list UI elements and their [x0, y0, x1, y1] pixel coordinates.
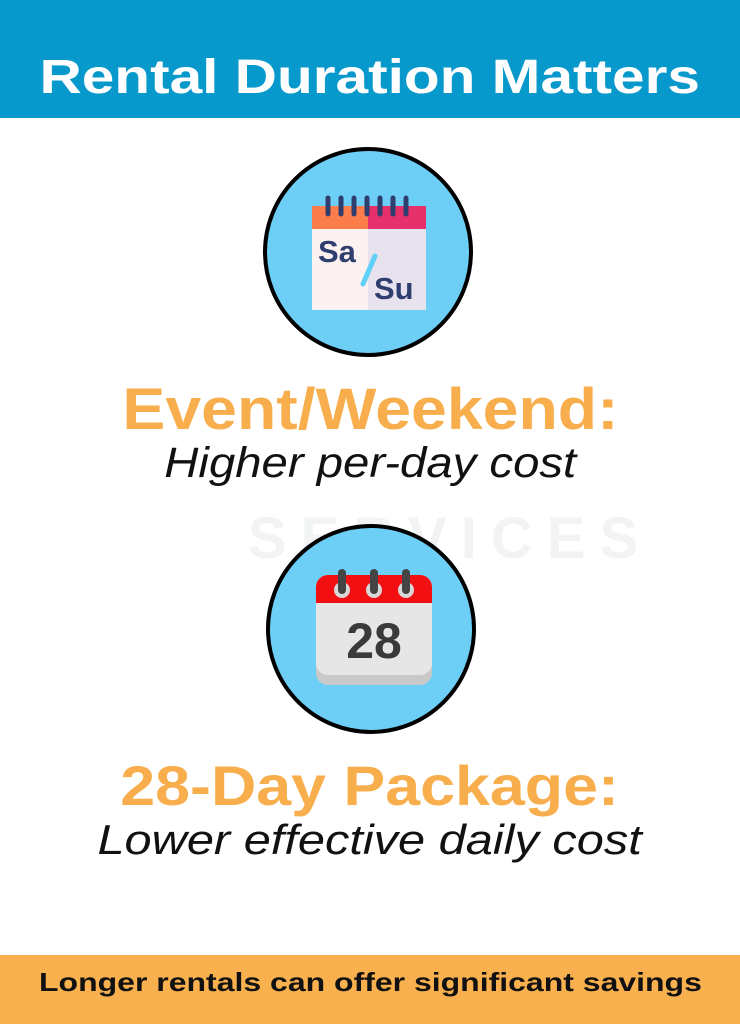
icon: weekend calendar: Sa — [318, 234, 357, 269]
footer bar — [0, 955, 740, 1024]
icon: 28-day calendar — [266, 524, 476, 734]
heading: 28-day package: 28-Day Package: — [121, 754, 619, 817]
footer text: Longer rentals can offer significant savings — [39, 967, 701, 997]
icon: 28-day calendar: 28 — [346, 613, 402, 669]
heading: event/weekend: Event/Weekend: — [122, 377, 618, 442]
text: higher per-day cost: Higher per-day cost — [164, 439, 576, 487]
watermark: SERVICES — [248, 506, 652, 571]
header bar — [0, 0, 740, 118]
icon: weekend calendar: Su — [374, 271, 414, 306]
icon: weekend calendar — [263, 147, 473, 357]
text: lower effective daily cost: Lower effective daily cost — [98, 816, 642, 863]
title: Rental Duration Matters — [40, 51, 700, 104]
